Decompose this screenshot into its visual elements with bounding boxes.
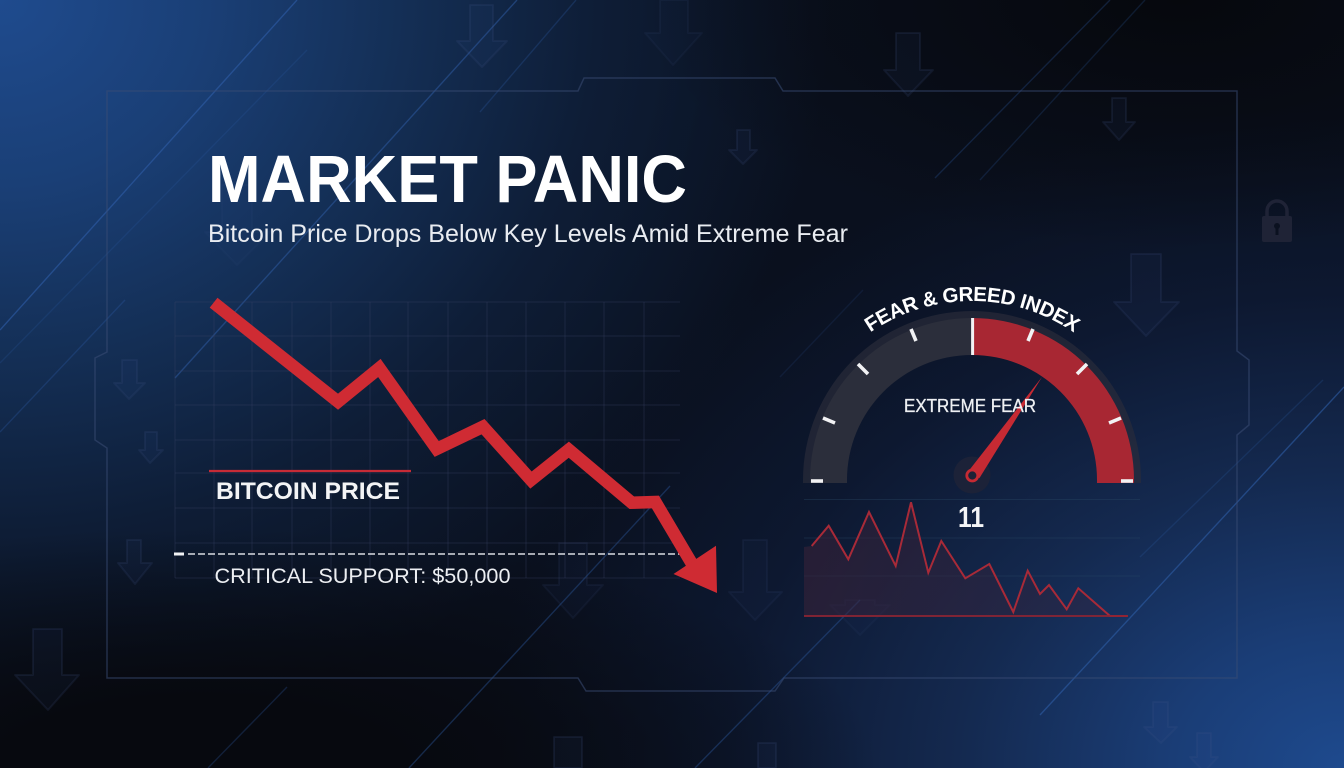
gauge red band bbox=[972, 318, 1134, 483]
gauge arc title: FEAR & GREED INDEX bbox=[864, 286, 1081, 332]
fear and greed gauge bbox=[803, 286, 1141, 494]
area baseline bbox=[804, 615, 1128, 617]
title: MARKET PANIC bbox=[208, 142, 687, 217]
gauge status label: EXTREME FEAR bbox=[904, 396, 1036, 416]
price line arrow bbox=[214, 303, 717, 593]
index value: 11 bbox=[958, 502, 984, 534]
legend rule bbox=[209, 470, 411, 472]
subtitle: Bitcoin Price Drops Below Key Levels Amid Extreme Fear bbox=[208, 220, 848, 248]
area line bbox=[812, 502, 1128, 616]
gauge fear band bbox=[810, 318, 972, 483]
gauge needle bbox=[967, 377, 1042, 481]
area fill bbox=[804, 502, 1110, 616]
critical support label: CRITICAL SUPPORT: $50,000 bbox=[214, 564, 511, 588]
mini area chart bbox=[804, 500, 1140, 616]
panel frame bbox=[95, 78, 1249, 691]
gauge outer ring bbox=[803, 311, 1141, 483]
gauge hub halo bbox=[954, 456, 990, 494]
icon: padlock bbox=[1262, 201, 1292, 242]
price chart bbox=[174, 302, 717, 593]
support line bbox=[174, 552, 680, 556]
bitcoin price label: BITCOIN PRICE bbox=[216, 478, 400, 505]
gauge ticks bbox=[811, 318, 1133, 481]
